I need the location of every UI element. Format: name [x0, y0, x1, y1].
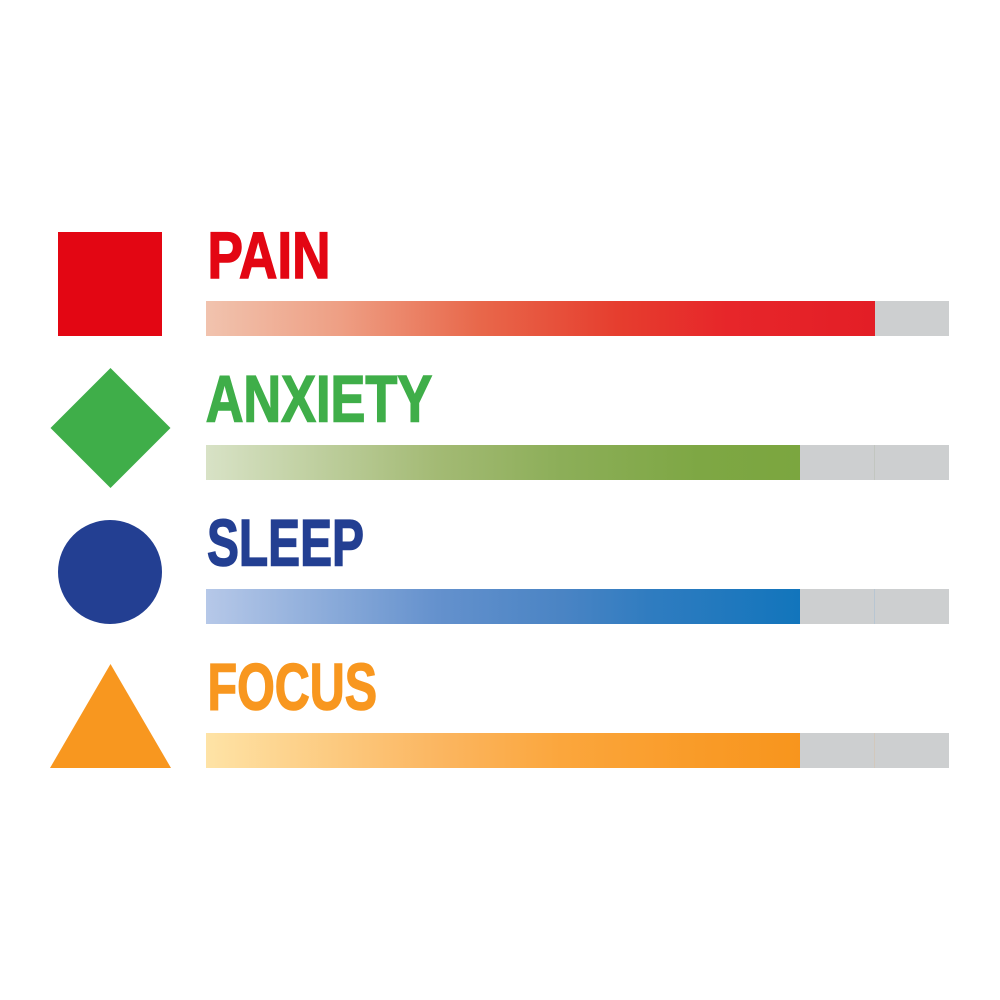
- heading: focus: FOCUS: [208, 650, 377, 724]
- heading: sleep: SLEEP: [207, 506, 364, 580]
- icon: blue circle: [58, 520, 162, 624]
- icon: green diamond: [50, 368, 170, 488]
- bar: focus: [206, 733, 949, 768]
- icon: orange triangle: [50, 664, 171, 768]
- row: pain: [58, 218, 949, 336]
- row: sleep: [58, 506, 949, 624]
- row: focus: [50, 650, 949, 768]
- row: anxiety: [50, 362, 949, 488]
- bar: anxiety: [206, 445, 949, 480]
- heading: anxiety: ANXIETY: [206, 362, 432, 436]
- bar: pain: [206, 301, 949, 336]
- icon: red square: [58, 232, 162, 336]
- bar: sleep: [206, 589, 949, 624]
- heading: pain: PAIN: [208, 218, 330, 292]
